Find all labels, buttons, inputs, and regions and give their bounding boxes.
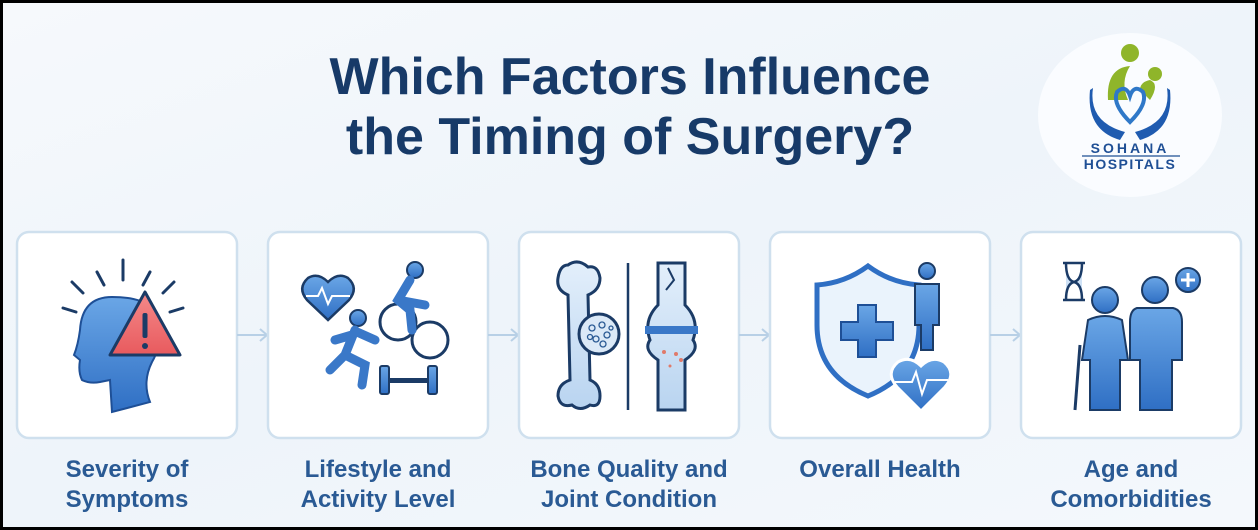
- labels: Bone Quality and: [530, 456, 728, 483]
- card: overall health: [770, 232, 990, 438]
- labels: Lifestyle and: [305, 456, 451, 483]
- labels: Comorbidities: [1050, 486, 1212, 513]
- arrow 1: [237, 329, 268, 341]
- icon: heart, runner, cyclist, dumbbell: [302, 262, 448, 394]
- title: Which Factors Influence: [330, 48, 930, 106]
- arrow 2: [488, 329, 519, 341]
- card: lifestyle and activity: [268, 232, 488, 438]
- arrow 3: [739, 329, 770, 341]
- title: [330, 48, 930, 166]
- labels: Overall Health: [799, 456, 961, 483]
- arrow 4: [990, 329, 1021, 341]
- icon: head with warning: [63, 260, 183, 412]
- icon: hourglass, elderly people, plus: [1063, 263, 1200, 410]
- card: severity of symptoms: [17, 232, 237, 438]
- labels: Age and: [1084, 456, 1178, 483]
- logo: Sohana Hospitals: HOSPITALS: [1084, 156, 1176, 172]
- title: the Timing of Surgery?: [346, 108, 914, 166]
- labels: [66, 456, 1212, 513]
- icon: bone and joint: [558, 262, 698, 410]
- labels: Symptoms: [66, 486, 188, 513]
- labels: Severity of: [66, 456, 189, 483]
- labels: Activity Level: [301, 486, 455, 513]
- labels: Joint Condition: [541, 486, 717, 513]
- card: bone quality: [519, 232, 739, 438]
- logo: Sohana Hospitals: SOHANA: [1091, 140, 1169, 156]
- logo: Sohana Hospitals: [1038, 33, 1222, 197]
- card: age and comorbidities: [1021, 232, 1241, 438]
- icon: shield, person, heart: [817, 263, 951, 411]
